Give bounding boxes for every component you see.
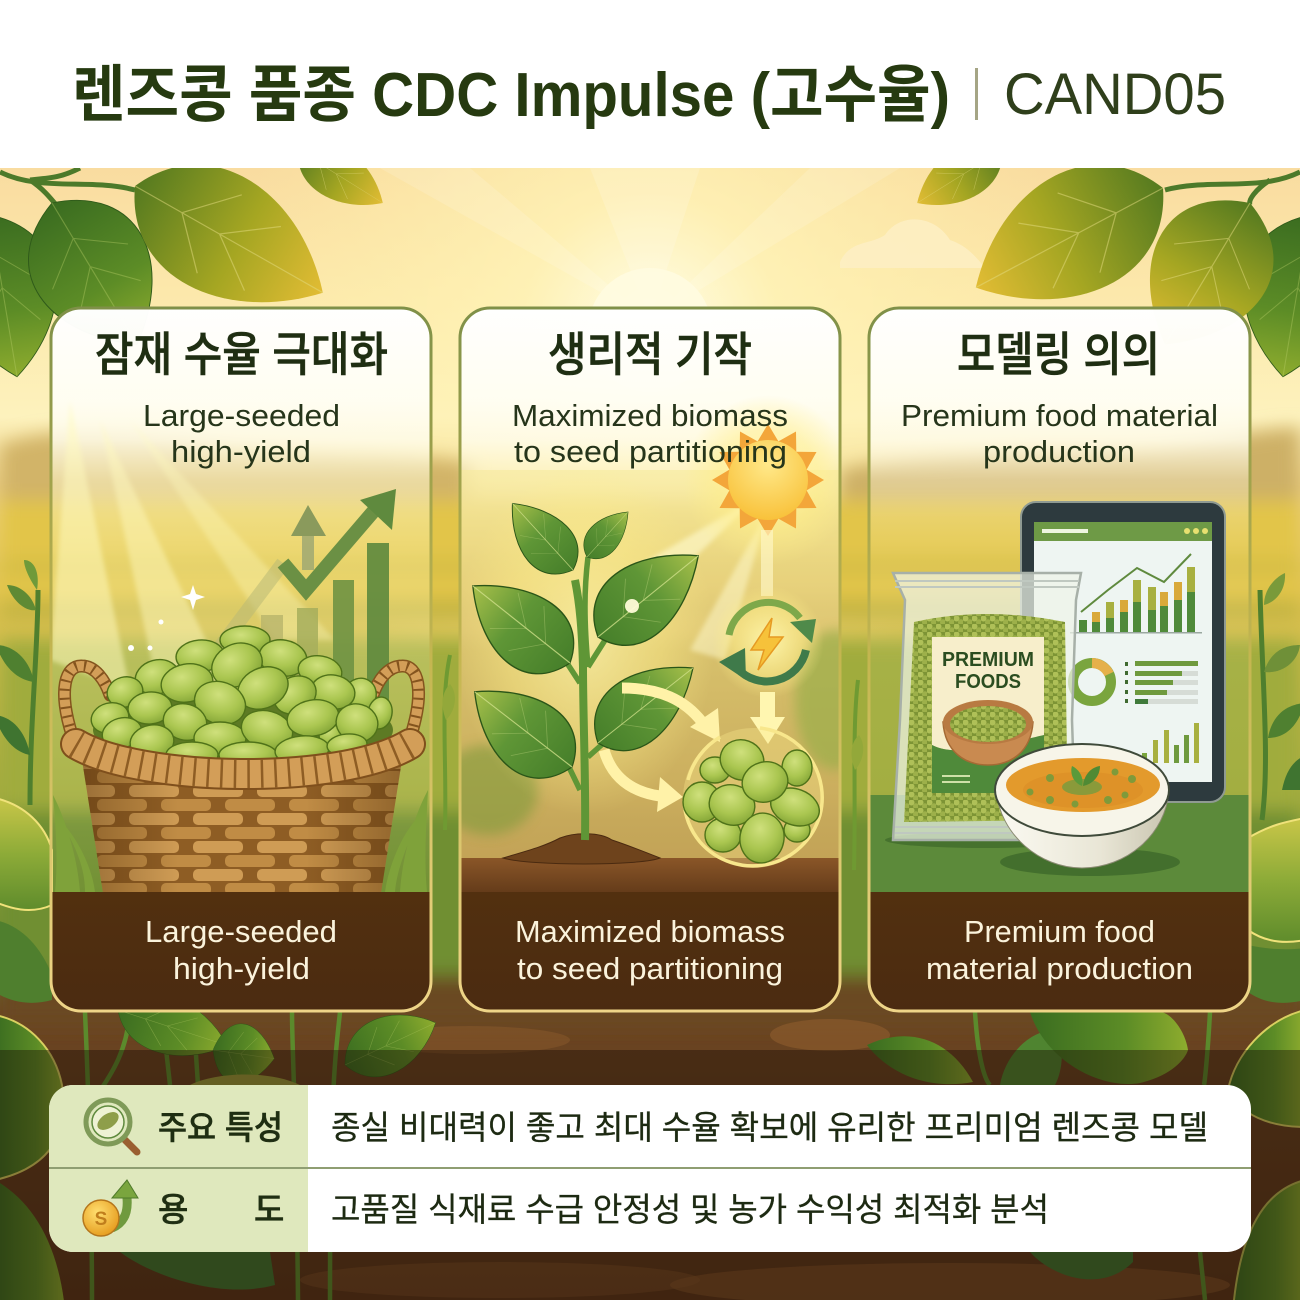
dark overlay behind table — [0, 1050, 1300, 1300]
icon: sun — [692, 400, 838, 596]
foliage top right — [917, 168, 1300, 378]
subtitle: Maximized biomass — [512, 398, 788, 433]
field plants on margins — [0, 560, 1300, 1003]
soil — [460, 858, 840, 894]
bar chart: rising yield — [128, 489, 396, 703]
foliage top left — [0, 168, 383, 378]
icon: magnifier with seed — [86, 1100, 137, 1152]
illustration: lentil soup bowl — [995, 744, 1180, 876]
small bowl on label — [943, 700, 1033, 765]
icon: coin with arrow: S — [95, 1209, 107, 1230]
grass at card edges — [53, 790, 428, 892]
arrows into seeds — [604, 688, 785, 812]
footer text: Large-seeded — [145, 914, 337, 949]
table surface — [869, 795, 1250, 895]
big leaf left edge — [0, 798, 52, 910]
footer band — [460, 892, 840, 1011]
subtitle: production — [983, 434, 1135, 469]
subtitle: to seed partitioning — [514, 434, 787, 469]
illustration: lentil plant — [472, 502, 699, 864]
donut chart — [1073, 663, 1111, 701]
subtitle: high-yield — [171, 434, 311, 469]
statement: key traits: 종실 비대력이 좋고 최대 수율 확보에 유리한 프리미엄 렌즈콩 모델 — [331, 1109, 1208, 1146]
bar chart on tablet — [1070, 554, 1202, 634]
bag label text: PREMIUM — [942, 649, 1034, 671]
footer text: to seed partitioning — [517, 951, 783, 986]
statement: uses: 고품질 식재료 수급 안정성 및 농가 수익성 최적화 분석 — [331, 1191, 1049, 1228]
heading: 모델링 의의 — [957, 328, 1160, 381]
bag label text: FOODS — [955, 671, 1021, 693]
panel: modeling significance — [869, 308, 1250, 1011]
title: CAND05 — [1004, 62, 1226, 127]
row label: 용 — [158, 1191, 188, 1228]
heading: 잠재 수율 극대화 — [95, 328, 388, 381]
footer text: high-yield — [173, 951, 310, 986]
panel: large-seeded high-yield — [50, 308, 431, 1011]
title: 렌즈콩 품종 CDC Impulse (고수율) — [72, 61, 950, 130]
illustration: premium foods bag — [885, 573, 1085, 848]
heading: 생리적 기작 — [548, 328, 752, 381]
subtitle: Large-seeded — [143, 398, 340, 433]
footer band — [51, 892, 431, 1011]
panel: physiological contribution — [458, 306, 842, 1012]
summary table — [49, 1085, 1251, 1252]
footer text: material production — [926, 951, 1193, 986]
illustration: basket of lentils — [65, 626, 419, 893]
foliage lower band — [0, 983, 1300, 1300]
footer band — [869, 892, 1250, 1011]
subtitle: Premium food material — [901, 398, 1218, 433]
row label: 도 — [254, 1191, 284, 1228]
footer text: Maximized biomass — [515, 914, 785, 949]
icon: energy cycle — [719, 596, 820, 692]
header band — [0, 0, 1300, 168]
footer text: Premium food — [964, 914, 1155, 949]
row label: 주요 특성 — [158, 1109, 283, 1146]
illustration: tablet dashboard — [1021, 502, 1225, 802]
illustration: seed cluster — [683, 728, 825, 868]
icon: coin with arrow — [83, 1180, 138, 1236]
